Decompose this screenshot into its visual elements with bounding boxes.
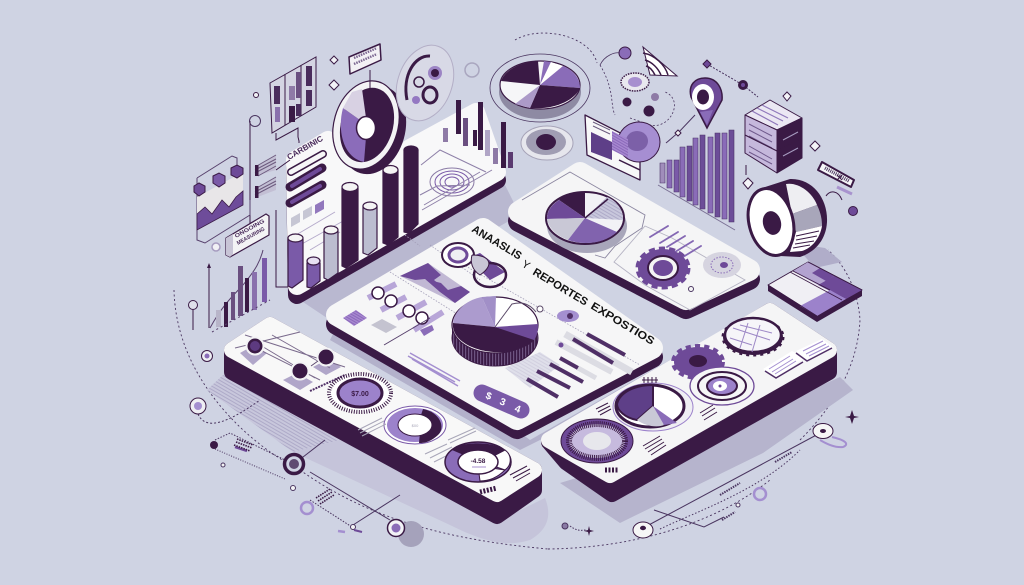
node: large	[398, 521, 424, 547]
callout: ongoing: MEASURING	[236, 226, 266, 247]
panel base	[337, 238, 652, 428]
gear purple	[674, 347, 722, 377]
panel top	[295, 112, 497, 286]
connector nodes left	[250, 92, 290, 287]
pill buttons: 4	[513, 403, 522, 416]
gauge: price: $7.00	[351, 391, 369, 398]
dashed strip	[310, 375, 345, 391]
eye icon	[557, 310, 579, 348]
tiny bars on panel edge	[443, 100, 513, 168]
hatched block	[343, 310, 367, 326]
inner frame lines	[522, 172, 745, 310]
title	[469, 223, 656, 348]
sparkles right	[743, 92, 858, 216]
title: EXPOSTIOS	[588, 300, 656, 348]
panel top	[519, 173, 749, 299]
tick labels	[596, 377, 717, 455]
panel: bottom left gauges	[232, 325, 534, 516]
donut chart: $00	[412, 423, 419, 428]
node: purple ring	[190, 398, 206, 414]
panel: central report	[337, 223, 656, 428]
main pie chart	[452, 296, 543, 366]
panel shadows	[207, 185, 853, 543]
cube server	[745, 100, 802, 173]
gear	[638, 249, 688, 287]
panel top	[549, 311, 829, 475]
pie chart: top center	[490, 54, 590, 122]
tick marks	[510, 466, 530, 481]
caption lines	[358, 418, 476, 462]
donut with value: -4.58	[471, 458, 486, 465]
horizontal bars chart	[527, 334, 632, 397]
title: Y	[519, 258, 532, 273]
panel top	[232, 325, 534, 494]
icon: map pin	[690, 78, 722, 128]
donut chart	[384, 406, 446, 444]
fingerprint target	[420, 150, 492, 210]
dotted orbit rings	[174, 33, 860, 549]
growth bar chart	[188, 250, 270, 332]
panel base	[232, 325, 534, 516]
panel base	[519, 182, 749, 308]
connector with nodes	[666, 60, 758, 143]
ring: gray target	[521, 126, 573, 160]
icon: wifi fan	[643, 47, 677, 76]
heading: dashboard label: CARBINIC	[286, 134, 325, 162]
floating disc with circles	[386, 37, 464, 129]
text lines panel	[408, 353, 460, 386]
pie chart	[613, 383, 693, 431]
gauge: price	[329, 374, 391, 412]
card: area chart	[194, 156, 250, 243]
linked rings	[442, 243, 506, 287]
callout: ongoing: ONGOING	[234, 219, 266, 240]
halftone dots	[505, 352, 560, 388]
small ring near callout	[212, 243, 220, 251]
panel top	[337, 229, 652, 419]
small ring	[465, 63, 479, 77]
small swatches	[291, 200, 324, 227]
table book	[768, 262, 862, 322]
menu pills	[290, 154, 323, 203]
slider chart	[235, 332, 345, 390]
panel: top center pie	[490, 54, 590, 160]
node: white disc right	[813, 424, 833, 438]
small target	[703, 252, 741, 278]
diamonds left	[329, 56, 339, 90]
radial dial	[561, 419, 633, 463]
connectors: bottom left network	[190, 350, 424, 547]
paper roll cylinder	[741, 179, 827, 260]
stripe flags	[255, 155, 276, 198]
panel: top right	[519, 172, 749, 310]
document with purple circle	[585, 115, 660, 180]
panel: bottom right	[549, 311, 833, 494]
panel: bar chart dashboard	[286, 100, 513, 295]
connectors: bottom right network	[562, 424, 846, 538]
column strip chart	[270, 57, 316, 143]
icon: dotted oval	[621, 73, 649, 91]
callout top	[349, 44, 381, 90]
node: dark ring	[284, 454, 304, 474]
title: REPORTES	[530, 266, 590, 309]
list lines	[650, 226, 701, 257]
panel base	[549, 311, 829, 494]
pill tag	[818, 162, 854, 194]
cards	[763, 339, 833, 378]
pill buttons: 3	[498, 396, 507, 409]
dotted lines under title	[390, 235, 640, 365]
title: ANAASLIS	[469, 223, 524, 262]
speaker disc	[323, 73, 416, 182]
column bars	[288, 146, 418, 288]
dumbbell sliders	[368, 284, 443, 336]
panel base	[295, 120, 497, 295]
callout: ongoing	[226, 214, 269, 257]
sparkle stars	[584, 410, 859, 536]
pill buttons	[482, 390, 522, 416]
icon cluster: dots and wifi	[600, 47, 677, 126]
pill buttons: $	[484, 390, 493, 403]
clock gear	[723, 318, 783, 355]
pie chart	[546, 192, 627, 253]
purple zigzag	[400, 263, 470, 303]
node: white disc	[633, 522, 653, 538]
donut with value	[445, 442, 511, 482]
target rings	[690, 367, 754, 405]
purple bar cluster	[658, 130, 735, 230]
